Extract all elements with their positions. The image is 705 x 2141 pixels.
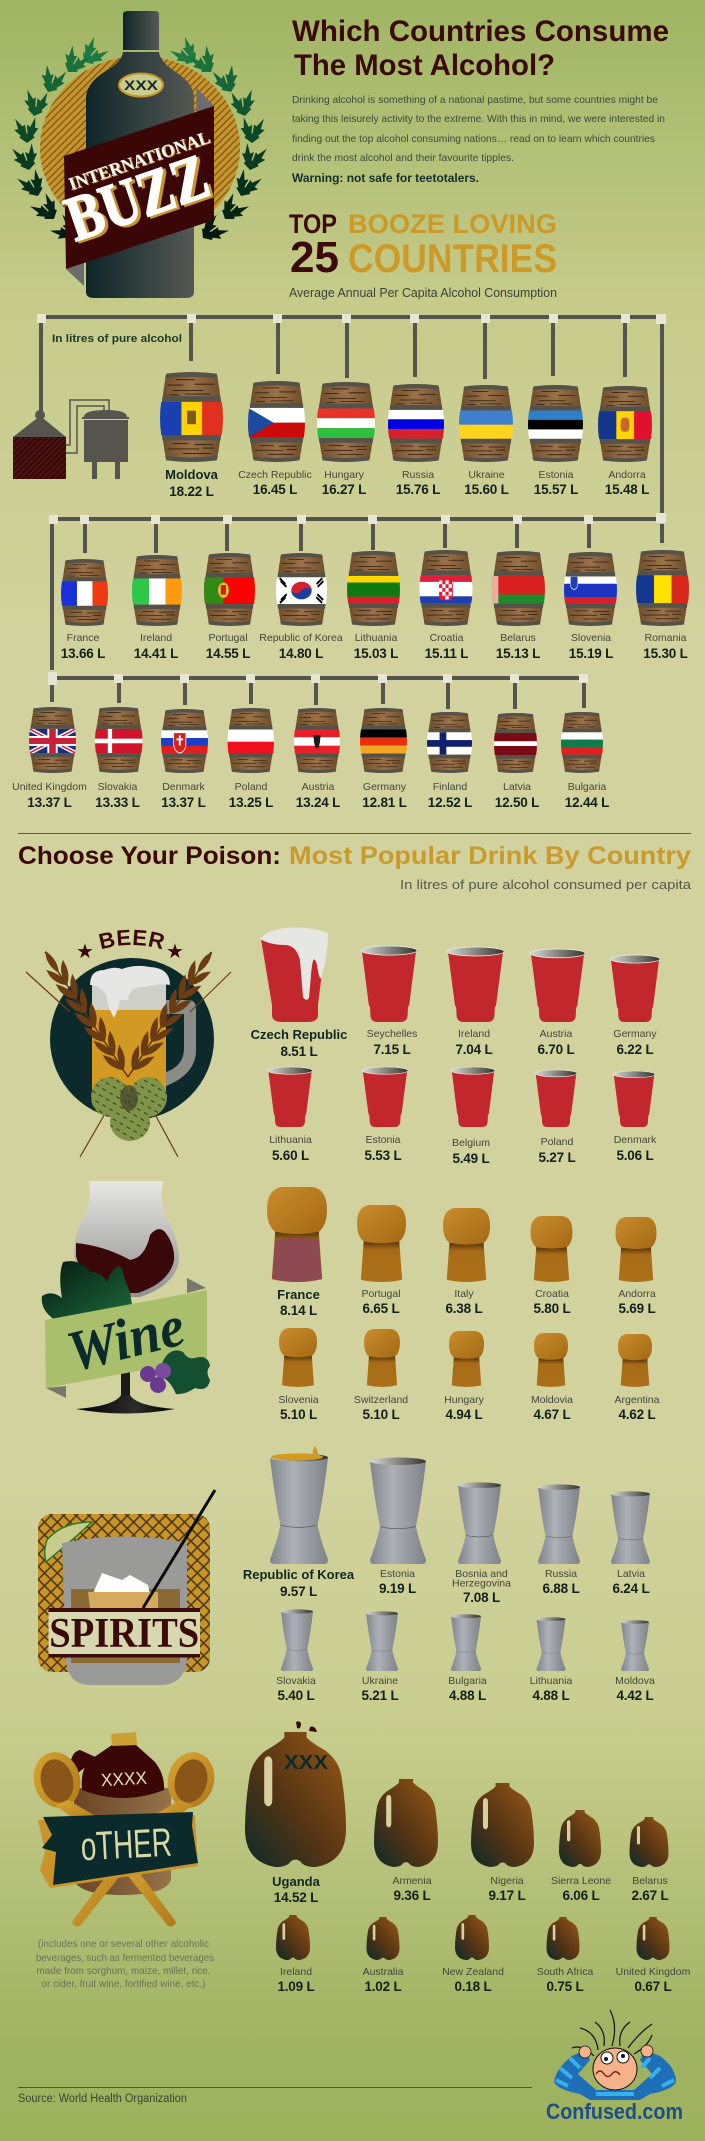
heading: Choose Your Poison: Choose Your Poison: [18,842,281,870]
jug: New Zealand: 0.18 L [454,1979,492,1994]
jigger: Estonia: Estonia [380,1568,415,1580]
cup: Poland: 5.27 L [538,1150,576,1165]
icon: International Buzz bottle emblem: INTERNATIONAL [66,127,212,194]
barrel: Denmark: Denmark [162,781,206,793]
cork: Croatia [530,1216,572,1316]
cup: Seychelles: 7.15 L [373,1042,411,1057]
cork: Italy [443,1208,490,1316]
jigger: Republic of Korea: Republic of Korea [243,1567,355,1582]
icon: International Buzz bottle emblem: INTERNATIONAL [67,128,214,195]
title [292,15,669,82]
cork: Argentina: 4.62 L [618,1407,656,1422]
cork: Argentina [615,1334,660,1422]
barrel: Latvia: Latvia [503,781,531,793]
jug: Armenia: 9.36 L [393,1888,431,1903]
barrel: Belarus [492,551,545,661]
barrel: Poland [228,708,274,810]
panel: other emblem [28,1732,220,1926]
cork: Andorra [616,1217,656,1316]
jigger: Republic of Korea [243,1446,355,1599]
barrel: Hungary [317,382,375,497]
barrel: Romania [636,550,689,661]
barrel: Poland: Poland [235,781,268,793]
jigger: Russia: 6.88 L [542,1581,580,1596]
intro text: Drinking alcohol is something of a national pastime, but some countries might be [292,95,658,106]
barrel: Romania: Romania [644,632,687,644]
jug: Uganda: 14.52 L [274,1890,318,1905]
jug: Armenia: Armenia [392,1875,432,1887]
barrel: France [61,559,108,661]
cup: Austria: Austria [540,1028,572,1040]
cup: Austria [530,949,585,1057]
jug: New Zealand: New Zealand [442,1966,504,1978]
note: other beverages: (includes one or several other alcoholic [38,1938,209,1950]
barrel: Andorra: 15.48 L [605,482,649,497]
barrel: Ireland [132,555,182,661]
cup: Ireland [447,947,504,1057]
cork: Hungary: Hungary [444,1394,485,1406]
cork: Slovenia: 5.10 L [280,1407,317,1422]
heading: Choose Your Poison [18,842,691,892]
barrel: Poland: 13.25 L [229,795,273,810]
cup: Belgium: Belgium [452,1137,490,1149]
cork: Moldovia [531,1333,573,1422]
cork: Italy: Italy [454,1288,474,1300]
panel: beer emblem: ★ [76,939,94,963]
jug: United Kingdom: 0.67 L [634,1979,672,1994]
intro text: taking this leisurely activity to the extreme. With this in mind, we were interested in [292,114,665,125]
jigger: Latvia [611,1491,650,1596]
barrel: Slovakia: Slovakia [98,781,137,793]
cup: Germany: Germany [613,1028,657,1040]
title: The Most Alcohol? [294,49,555,82]
barrel: Bulgaria: Bulgaria [568,781,606,793]
jigger: Lithuania: 4.88 L [532,1688,570,1703]
barrel: Finland: Finland [433,781,467,793]
jug: Australia: 1.02 L [364,1979,402,1994]
cup: Czech Republic [251,928,347,1059]
jug: Ireland: 1.09 L [277,1979,315,1994]
jigger: Lithuania: Lithuania [530,1675,572,1687]
jug: Sierra Leone: 6.06 L [562,1888,600,1903]
cup: Germany [610,955,660,1057]
barrel: Germany [360,708,407,810]
jug: South Africa [537,1917,593,1994]
jug: Ireland: Ireland [280,1966,312,1978]
cork: Moldovia: Moldovia [531,1394,573,1406]
jigger: Moldova: Moldova [615,1675,655,1687]
barrel: Estonia: 15.57 L [534,482,578,497]
barrel: Belarus: 15.13 L [496,646,540,661]
cup: Seychelles: Seychelles [367,1028,417,1040]
cork: Portugal: 6.65 L [362,1301,400,1316]
panel: beer emblem: BEER [98,930,164,950]
barrel: Hungary: Hungary [324,469,365,481]
panel: wine emblem: Wine [61,1293,191,1384]
barrel: Czech Republic: Czech Republic [238,469,312,481]
barrel: Russia: Russia [402,469,434,481]
barrel: Republic of Korea: 14.80 L [279,646,323,661]
logo: Confused.com character [546,2010,683,2124]
jug: United Kingdom: United Kingdom [616,1966,691,1978]
cork: Portugal [357,1205,406,1316]
heading: Top 25 booze loving countries [289,209,557,300]
cork: Slovenia [278,1328,319,1422]
cup: Ireland: Ireland [458,1028,490,1040]
barrel: Croatia: 15.11 L [425,646,468,661]
jug: South Africa: South Africa [537,1966,593,1978]
note: other beverages: beverages, such as fermented beverages [36,1952,214,1964]
cup: Estonia: Estonia [365,1134,401,1146]
barrel: Republic of Korea [259,553,343,661]
jug: Armenia [374,1779,438,1903]
cup: Germany: 6.22 L [616,1042,654,1057]
barrel: Andorra [598,386,652,497]
jigger: Bosnia and Herzegovina: Bosnia and [455,1568,508,1580]
barrel: France: 13.66 L [61,646,105,661]
jug: Uganda: XXX [284,1752,329,1774]
source: Source: World Health Organization [18,2093,187,2105]
intro text [292,95,665,185]
cup: Austria: 6.70 L [537,1042,575,1057]
note: other beverages: or cider, fruit wine, fortified wine, etc.) [42,1978,206,1990]
barrel: Germany: Germany [363,781,407,793]
panel: spirits emblem [38,1490,215,1685]
jigger: Slovakia [276,1609,316,1703]
cork: Croatia: Croatia [535,1288,569,1300]
barrel: Austria: Austria [302,781,334,793]
icon: International Buzz bottle emblem: BUZZ [60,142,221,256]
cork: Slovenia: Slovenia [278,1394,319,1406]
intro text: Warning: not safe for teetotalers. [292,173,479,185]
barrel: Estonia: Estonia [538,469,574,481]
jigger: Bulgaria [448,1614,487,1703]
barrel: France: France [67,632,99,644]
barrel: Latvia: 12.50 L [495,795,539,810]
barrel: United Kingdom: United Kingdom [12,781,87,793]
cup: Poland: Poland [541,1136,574,1148]
barrel: Ukraine [459,385,513,497]
barrel: Moldova: 18.22 L [169,484,214,499]
icon: International Buzz bottle emblem [8,11,271,298]
jigger: Ukraine [361,1611,399,1703]
logo: Confused.com character: Confused.com [546,2099,683,2124]
note: other beverages [36,1938,214,1990]
barrel: Moldova [160,372,223,499]
barrel: Denmark [161,709,208,810]
barrel: Germany: 12.81 L [362,795,407,810]
pipe network [37,314,666,709]
barrel: Austria: 13.24 L [296,795,340,810]
jigger: Estonia: 9.19 L [379,1581,416,1596]
jigger: Bosnia and Herzegovina: 7.08 L [463,1590,500,1605]
barrel: Finland: 12.52 L [428,795,472,810]
jigger: Bulgaria: 4.88 L [449,1688,486,1703]
jug: Sierra Leone: Sierra Leone [551,1875,611,1887]
jigger: Moldova [615,1620,655,1703]
jigger: Russia [538,1484,580,1596]
barrel: United Kingdom: 13.37 L [27,795,72,810]
cork: Switzerland: Switzerland [354,1394,408,1406]
barrel: Slovenia: 15.19 L [569,646,613,661]
cork: Andorra: 5.69 L [618,1301,656,1316]
cup: Seychelles [361,946,417,1057]
heading: Top 25 booze loving countries: COUNTRIES [348,237,557,281]
jigger: Latvia: 6.24 L [612,1581,650,1596]
barrel: Belarus: Belarus [500,632,536,644]
jug: Nigeria: Nigeria [490,1875,524,1887]
icon: International Buzz bottle emblem: XXX [124,77,159,93]
barrel: Bulgaria: 12.44 L [565,795,609,810]
cup: Denmark: Denmark [614,1134,657,1146]
intro text: drink the most alcohol and their favourite tipples. [292,153,514,164]
barrel: Andorra: Andorra [608,469,646,481]
barrel: Slovakia [95,707,142,810]
jigger: Slovakia: Slovakia [276,1675,316,1687]
barrel: Croatia [420,550,472,661]
cork: Croatia: 5.80 L [533,1301,571,1316]
barrel: Slovakia: 13.33 L [95,795,140,810]
jug: South Africa: 0.75 L [546,1979,584,1994]
jug: New Zealand [442,1915,504,1994]
cup: Belgium [451,1067,495,1166]
cork: France [267,1187,327,1318]
title: Which Countries Consume [292,15,669,48]
jug: Nigeria [471,1783,534,1903]
barrel: Ukraine: Ukraine [468,469,505,481]
cork: Portugal: Portugal [361,1288,401,1300]
barrel: Russia [388,384,444,497]
barrel: Lithuania: Lithuania [355,632,397,644]
jigger: Bosnia and Herzegovina: Herzegovina [452,1578,511,1590]
jigger: Moldova: 4.42 L [616,1688,654,1703]
jug: Australia [363,1917,404,1994]
jigger: Bulgaria: Bulgaria [448,1675,487,1687]
barrel: Republic of Korea: Republic of Korea [259,632,343,644]
intro text: finding out the top alcohol consuming nations… read on to learn which countries [292,134,655,145]
heading: Choose Your Poison: Most Popular Drink By Country [289,842,691,870]
barrel: Denmark: 13.37 L [161,795,206,810]
panel: other emblem: oTHER [80,1821,173,1869]
cork: France: 8.14 L [280,1303,317,1318]
barrel: Russia: 15.76 L [396,482,440,497]
barrel: Latvia [494,713,539,810]
cup: Lithuania: Lithuania [269,1134,312,1146]
barrel: Portugal [204,553,255,661]
barrel: Czech Republic [238,381,312,497]
label: in litres of pure alcohol: In litres of pure alcohol [52,333,182,345]
barrel: Czech Republic: 16.45 L [253,482,297,497]
barrel: Lithuania [347,551,400,661]
jug: Nigeria: 9.17 L [488,1888,526,1903]
barrel: Finland [427,712,472,810]
barrel: Lithuania: 15.03 L [354,646,398,661]
barrel: Austria [294,708,340,810]
heading: Top 25 booze loving countries: Average Annual Per Capita Alcohol Consumption [289,286,557,300]
jigger: Estonia [370,1458,426,1596]
barrel: Ukraine: 15.60 L [464,482,509,497]
panel: spirits emblem: SPIRITS [49,1611,199,1657]
jug: Uganda [245,1721,346,1905]
note: other beverages: made from sorghum, maize, millet, rice, [36,1965,210,1977]
cup: Denmark [613,1071,657,1163]
barrel: Ireland: Ireland [140,632,172,644]
barrel: United Kingdom [12,707,87,810]
jigger: Latvia: Latvia [617,1568,645,1580]
cup: Ireland: 7.04 L [455,1042,493,1057]
barrel: Hungary: 16.27 L [322,482,366,497]
cork: Hungary: 4.94 L [445,1407,483,1422]
jigger: Slovakia: 5.40 L [277,1688,315,1703]
icon: still [13,400,129,479]
barrel: Bulgaria [561,712,609,810]
cork: Argentina: Argentina [615,1394,660,1406]
barrel: Slovenia: Slovenia [571,632,611,644]
jigger: Republic of Korea: 9.57 L [280,1584,317,1599]
heading: Top 25 booze loving countries: 25 [290,233,339,282]
jigger: Ukraine: 5.21 L [361,1688,399,1703]
heading: Choose Your Poison: In litres of pure alcohol consumed per capita [400,878,691,892]
cork: Andorra: Andorra [618,1288,656,1300]
jug: United Kingdom [616,1917,691,1994]
barrel: Portugal: Portugal [208,632,248,644]
barrel: Estonia [528,385,583,497]
cup: Belgium: 5.49 L [452,1151,490,1166]
barrel: Moldova: Moldova [165,467,219,482]
cup: Lithuania [268,1067,312,1163]
jigger: Bosnia and Herzegovina [452,1482,511,1605]
cork: Switzerland [354,1329,408,1422]
cup: Lithuania: 5.60 L [272,1148,309,1163]
barrel: Romania: 15.30 L [643,646,688,661]
jug: Uganda: Uganda [272,1874,321,1889]
cork: Hungary [444,1331,485,1422]
cup: Estonia [362,1067,408,1163]
jigger: Russia: Russia [545,1568,577,1580]
jug: Belarus: 2.67 L [631,1888,669,1903]
cork: France: France [277,1287,320,1302]
barrel: Croatia: Croatia [430,632,464,644]
cup: Estonia: 5.53 L [364,1148,402,1163]
barrel: Ireland: 14.41 L [134,646,178,661]
panel: beer emblem: ★ [166,939,184,963]
jigger: Lithuania [530,1617,572,1703]
jug: Ireland [276,1915,315,1994]
cup: Denmark: 5.06 L [616,1148,654,1163]
cup: Czech Republic: 8.51 L [280,1044,318,1059]
icon: International Buzz bottle emblem: BUZZ [57,140,218,255]
panel: beer emblem [26,930,232,1158]
jug: Belarus [630,1817,669,1903]
jug: Sierra Leone [551,1810,611,1903]
barrel: Portugal: 14.55 L [206,646,250,661]
panel: wine emblem [42,1181,210,1414]
jug: Australia: Australia [363,1966,404,1978]
cup: Poland [535,1070,577,1165]
cork: Switzerland: 5.10 L [362,1407,400,1422]
barrel: Slovenia [564,552,617,661]
panel: other emblem: XXXX [100,1768,147,1790]
jigger: Ukraine: Ukraine [362,1675,398,1687]
cork: Italy: 6.38 L [445,1301,483,1316]
cork: Moldovia: 4.67 L [533,1407,571,1422]
heading: Top 25 booze loving countries: BOOZE LOVING [348,209,557,239]
heading: Top 25 booze loving countries: TOP [289,209,337,239]
cup: Czech Republic: Czech Republic [251,1027,347,1042]
jug: Belarus: Belarus [632,1875,668,1887]
